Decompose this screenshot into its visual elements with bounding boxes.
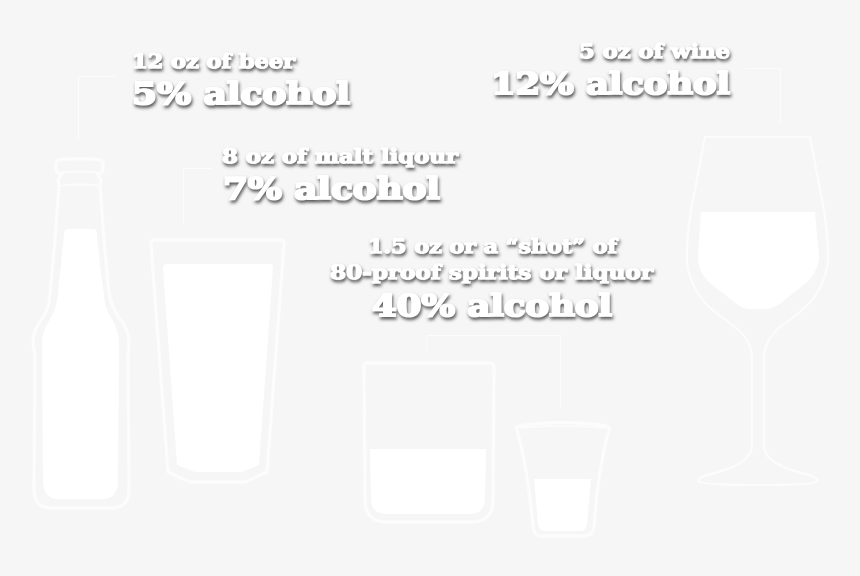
label: spirits: 80-proof spirits or liquor	[330, 260, 654, 284]
connector: wine	[745, 68, 780, 124]
label: malt liquor	[222, 144, 459, 207]
icon: beer bottle	[33, 159, 129, 508]
label: spirits: 40% alcohol	[372, 289, 612, 324]
label: beer: 12 oz of beer	[132, 49, 296, 73]
icon: rocks glass	[364, 363, 494, 522]
label: spirits: 1.5 oz or a “shot” of	[368, 234, 619, 258]
label: wine: 5 oz of wine	[579, 39, 730, 63]
icon: pint glass	[151, 240, 284, 482]
label: beer	[132, 49, 350, 112]
label: malt liquor: 8 oz of malt liqour	[222, 144, 459, 168]
label: wine	[491, 39, 730, 102]
connector: beer	[78, 76, 116, 139]
label: beer: 5% alcohol	[132, 77, 350, 112]
icon: shot glass	[517, 422, 609, 536]
connector: spirits	[427, 336, 560, 407]
label: malt liquor: 7% alcohol	[223, 172, 440, 207]
icon: wine glass	[687, 137, 828, 485]
label: wine: 12% alcohol	[491, 67, 730, 102]
label: spirits	[330, 234, 654, 324]
connector: malt liquor	[184, 168, 212, 223]
